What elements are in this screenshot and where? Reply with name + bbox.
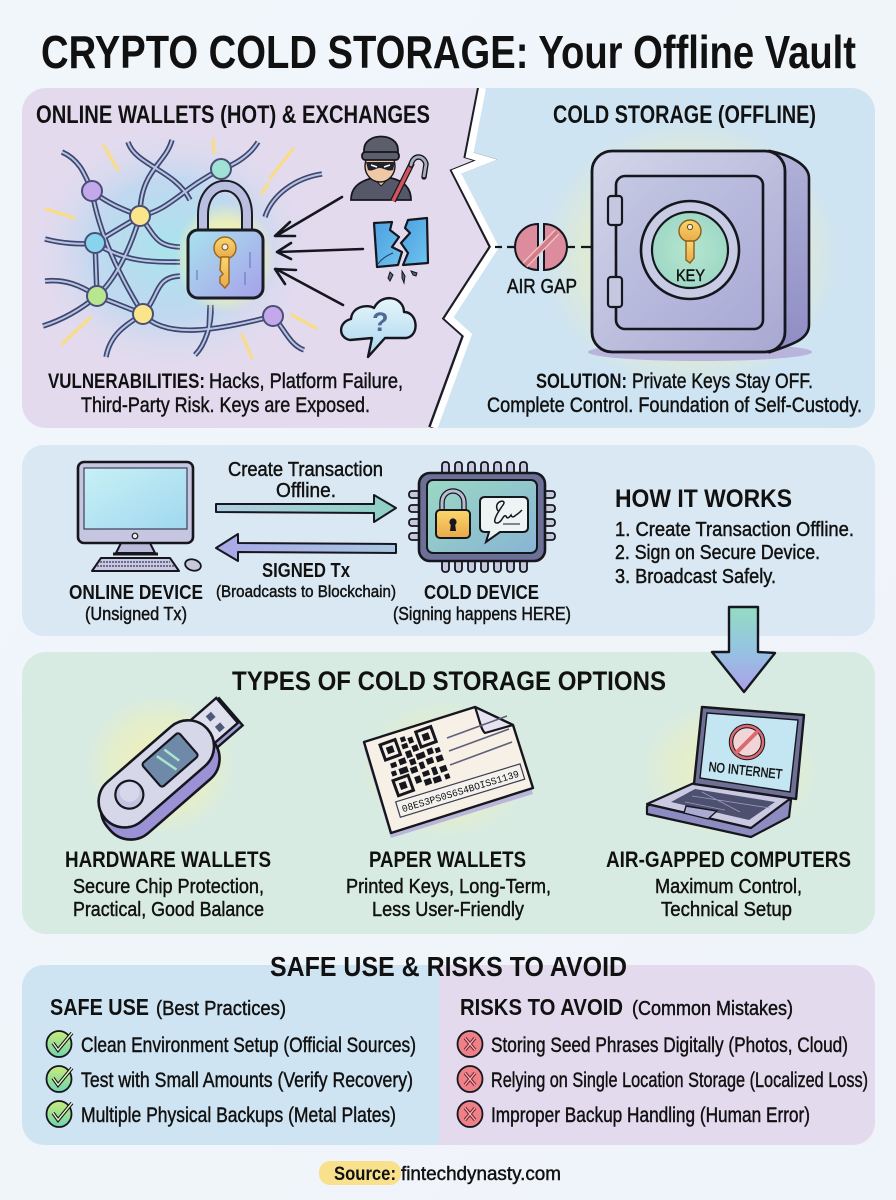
- heading: cold storage: COLD STORAGE (OFFLINE): [553, 101, 816, 129]
- arrows: threats pointing to lock: [275, 197, 363, 305]
- arrow: back to online device: [216, 534, 396, 561]
- sub-heading: risks: [460, 994, 793, 1020]
- item: physical backups: [46, 1101, 396, 1127]
- option: paper wallets: Printed Keys, Long-Term,: [346, 875, 551, 898]
- option: hardware wallets: Practical, Good Balance: [73, 898, 264, 921]
- heading: types of cold storage: TYPES OF COLD STORAGE OPTIONS: [232, 666, 666, 696]
- item: test small amounts: [46, 1066, 413, 1092]
- option: air-gapped computers: AIR-GAPPED COMPUTERS: [606, 847, 851, 872]
- text: how it works steps: HOW IT WORKS: [615, 485, 792, 513]
- panel: how it works: [22, 445, 875, 636]
- text: how it works steps: [615, 485, 854, 588]
- text: vulnerabilities: Third-Party Risk. Keys are Exposed.: [81, 394, 370, 417]
- option: hardware wallets: Secure Chip Protection,: [73, 875, 264, 898]
- wallet address string: 08ES3PS0S6S4BOISS1139: [401, 770, 521, 816]
- option: air-gapped computers: [606, 847, 851, 921]
- item: clean environment: [46, 1031, 416, 1057]
- source credit: Source:: [334, 1164, 396, 1185]
- QR code: [380, 726, 450, 797]
- icon: online desktop computer: [78, 462, 202, 572]
- icon: cold device chip: [409, 462, 555, 572]
- label: online device: [69, 581, 203, 624]
- network nodes: [82, 159, 283, 326]
- text: how it works steps: 1. Create Transaction Offline.: [615, 519, 854, 541]
- label: key: KEY: [676, 266, 705, 285]
- item: backup handling: Improper Backup Handling (Human Error): [491, 1104, 810, 1127]
- option: paper wallets: [346, 847, 551, 921]
- column: safe use: [46, 994, 416, 1127]
- option: air-gapped computers: Technical Setup: [661, 898, 792, 921]
- icon: air-gapped laptop: [647, 707, 804, 837]
- option: paper wallets: PAPER WALLETS: [369, 847, 526, 872]
- icon: broken tablet: [374, 218, 428, 283]
- label: cold device: (Signing happens HERE): [393, 604, 571, 624]
- sub-heading: safe use: [50, 994, 286, 1020]
- source credit: [319, 1161, 561, 1185]
- sub-heading: risks: RISKS TO AVOID: [460, 994, 623, 1020]
- label: cold device: [393, 581, 571, 624]
- text: create transaction offline: Offline.: [276, 480, 336, 502]
- icon: cloud with question mark: ?: [372, 307, 388, 337]
- panel: online wallets vs cold storage: [22, 88, 875, 428]
- heading: online wallets: ONLINE WALLETS (HOT) & EXCHANGES: [36, 101, 430, 129]
- option: hardware wallets: HARDWARE WALLETS: [65, 847, 271, 872]
- label: cold device: COLD DEVICE: [424, 581, 539, 604]
- text: signed tx: (Broadcasts to Blockchain): [216, 583, 396, 601]
- column: risks to avoid: [458, 994, 868, 1127]
- text: vulnerabilities: [48, 370, 403, 417]
- panel backgrounds: hot and cold: [22, 88, 875, 428]
- text: signed tx: [216, 560, 396, 601]
- text: vulnerabilities: VULNERABILITIES:: [48, 370, 205, 393]
- icon: vault safe with key: [588, 151, 812, 361]
- text: create transaction offline: [228, 459, 383, 502]
- panel background halves: [22, 965, 875, 1145]
- icon: paper wallet: [364, 707, 533, 838]
- option: paper wallets: Less User-Friendly: [372, 898, 525, 921]
- laptop screen text: NO INTERNET: [708, 759, 783, 782]
- text: solution: Private Keys Stay OFF.: [632, 370, 813, 393]
- sub-heading: safe use: SAFE USE: [50, 994, 149, 1020]
- item: test small amounts: Test with Small Amounts (Verify Recovery): [81, 1069, 413, 1092]
- sub-heading: risks: (Common Mistakes): [632, 998, 793, 1020]
- panel: safe use and risks: [22, 951, 875, 1145]
- icon: air gap symbol: [495, 224, 591, 298]
- label: online device: (Unsigned Tx): [85, 604, 187, 624]
- item: clean environment: Clean Environment Setup (Official Sources): [81, 1034, 416, 1057]
- icon: padlock with key: [175, 186, 275, 314]
- text: how it works steps: 3. Broadcast Safely.: [615, 566, 776, 588]
- source credit: fintechdynasty.com: [401, 1164, 561, 1185]
- arrow: to cold device: [216, 495, 396, 522]
- icon: hardware wallet usb: [88, 697, 243, 851]
- item: physical backups: Multiple Physical Backups (Metal Plates): [81, 1104, 396, 1127]
- icon: cloud with question mark: [341, 298, 416, 357]
- text: solution: [487, 370, 862, 417]
- label: air gap: AIR GAP: [507, 276, 577, 298]
- text: solution: SOLUTION:: [536, 370, 627, 393]
- network illustration: [27, 125, 322, 375]
- sub-heading: safe use: (Best Practices): [156, 998, 286, 1020]
- option: hardware wallets: [65, 847, 271, 921]
- text: how it works steps: 2. Sign on Secure Device.: [615, 542, 820, 564]
- text: signed tx: SIGNED Tx: [262, 560, 350, 582]
- text: vulnerabilities: Hacks, Platform Failure,: [209, 370, 403, 393]
- label: online device: ONLINE DEVICE: [69, 581, 203, 604]
- item: backup handling: [458, 1101, 810, 1127]
- option: air-gapped computers: Maximum Control,: [655, 875, 802, 898]
- heading: safe use and risks: SAFE USE & RISKS TO AVOID: [270, 951, 627, 982]
- arrow: down from how it works to types: [712, 607, 775, 692]
- panel: types of cold storage options: [22, 652, 875, 934]
- text: create transaction offline: Create Transaction: [228, 459, 383, 481]
- icon: thief with crowbar: [351, 136, 426, 201]
